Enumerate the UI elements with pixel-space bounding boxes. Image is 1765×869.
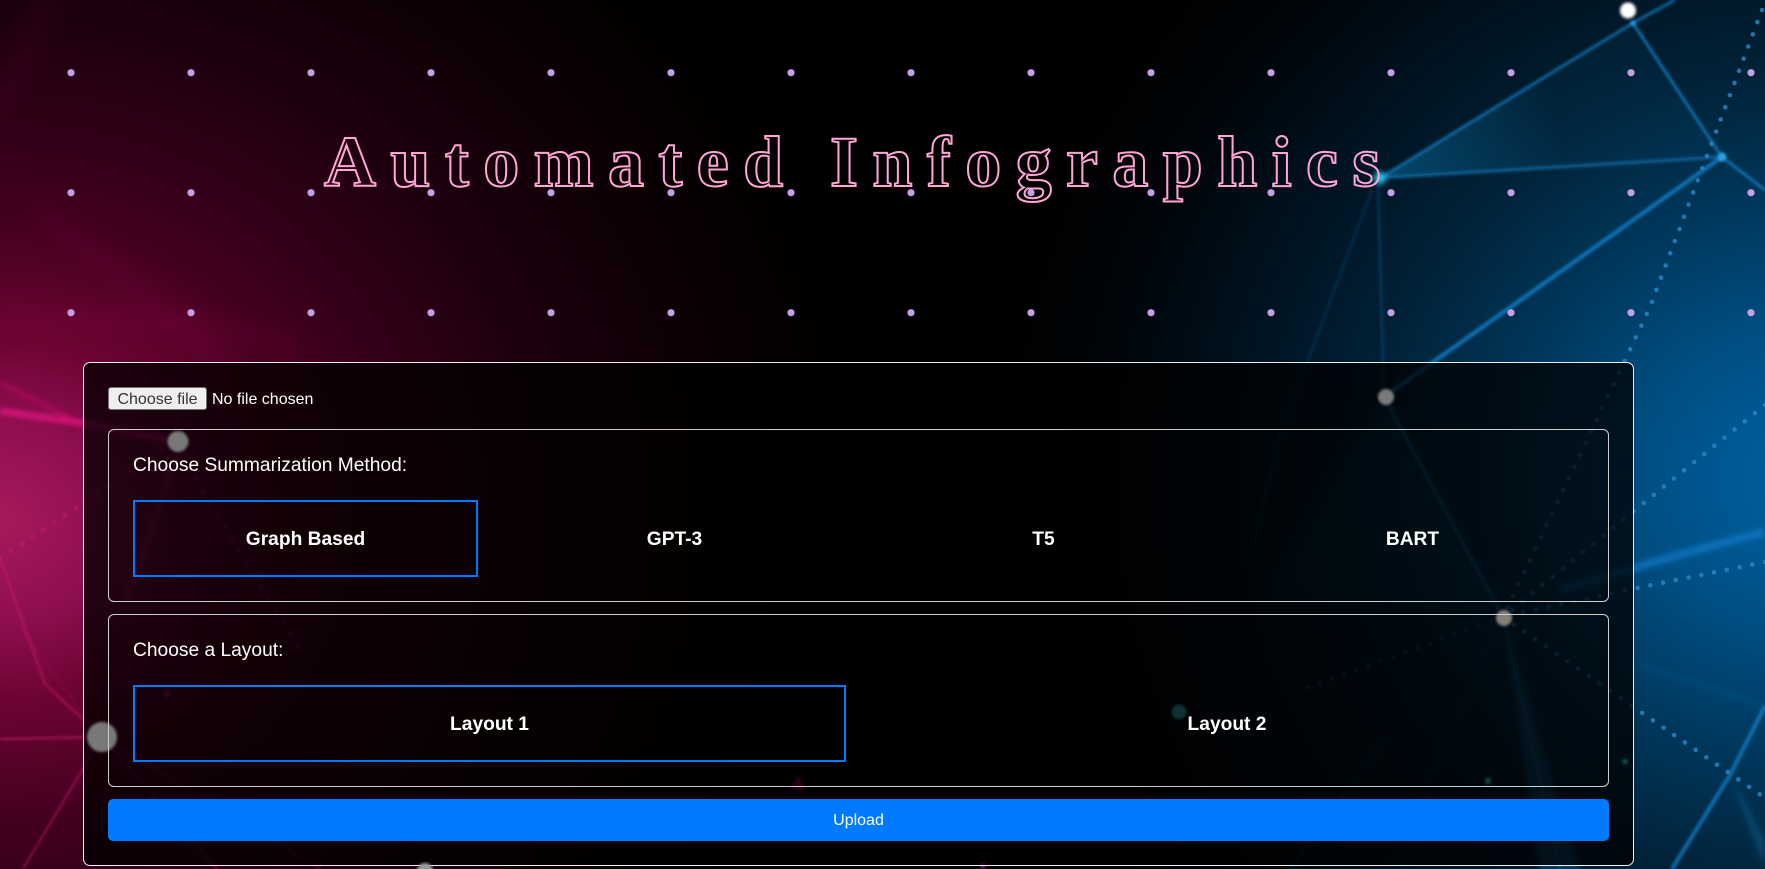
panel: upload form card bbox=[83, 362, 1634, 866]
upload button: Upload bbox=[833, 812, 884, 829]
heading: layout: Choose a Layout: bbox=[133, 640, 283, 661]
panel: layout bbox=[108, 614, 1609, 787]
option: GPT-3: GPT-3 bbox=[647, 528, 702, 550]
option: Graph Based bbox=[133, 500, 478, 577]
file chooser button bbox=[108, 387, 207, 410]
option: Layout 2: Layout 2 bbox=[1188, 714, 1266, 734]
option: T5: T5 bbox=[1032, 528, 1055, 550]
panel: summarization method bbox=[108, 429, 1609, 602]
dot grid bbox=[67, 69, 1755, 316]
file chooser button: Choose file bbox=[117, 391, 198, 408]
option: BART: BART bbox=[1386, 528, 1439, 550]
option: Layout 1: Layout 1 bbox=[450, 714, 529, 734]
upload button bbox=[108, 799, 1609, 841]
option: Layout 1 bbox=[133, 685, 846, 762]
option: Graph Based: Graph Based bbox=[246, 528, 365, 550]
file status text: No file chosen bbox=[212, 391, 313, 408]
heading: summarization method: Choose Summarization Method: bbox=[133, 455, 407, 476]
